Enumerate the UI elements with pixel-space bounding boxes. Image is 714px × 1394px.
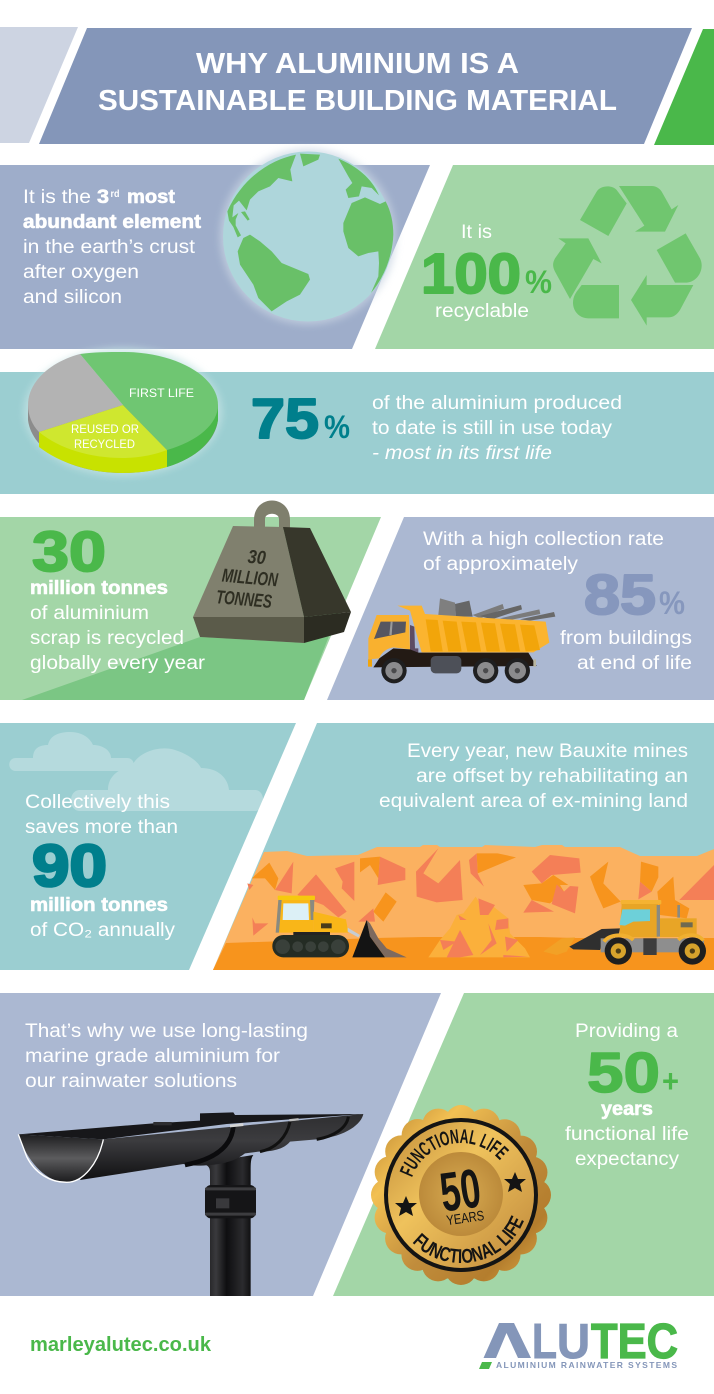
text: aluminium still in use: - most in its first life: [372, 443, 552, 464]
text: rainwater solutions: marine grade aluminium for: [25, 1046, 281, 1067]
text: aluminium still in use: [372, 393, 622, 464]
panel: 75 percent still in use: [0, 348, 714, 494]
icon: bulldozer: [272, 896, 407, 957]
logo: Alutec: L: [532, 1315, 557, 1369]
title banner: WHY ALUMINIUM IS A: [196, 48, 519, 80]
text: fifty plus years: expectancy: [575, 1149, 680, 1170]
text: third most abundant: and silicon: [23, 287, 122, 308]
stat: 75 percent: %: [324, 409, 350, 445]
icon: weight: 30: [247, 547, 267, 569]
panel: CO2 saving: [0, 723, 296, 970]
text: collection rate: of approximately: [423, 554, 579, 575]
chart: pie of aluminium life: RECYCLED: [74, 439, 135, 451]
panel: long-lasting marine grade: [0, 993, 441, 1296]
text: scrap recycled: million tonnes: [30, 578, 168, 599]
text: collection rate: from buildings: [560, 628, 692, 649]
icon: weight: [193, 500, 351, 643]
illustration: gutter and downpipe: [18, 1112, 363, 1296]
text: scrap recycled: of aluminium: [30, 603, 149, 624]
text: scrap recycled: [30, 520, 206, 674]
text: collection rate: %: [659, 585, 685, 621]
chart: pie of aluminium life: [24, 348, 222, 476]
text: bauxite offset: [379, 741, 688, 812]
icon: weight: MILLION: [221, 566, 280, 591]
text: scrap recycled: globally every year: [30, 653, 206, 674]
text: fifty plus years: [565, 1021, 689, 1170]
text: fifty plus years: 50: [587, 1041, 660, 1105]
text: rainwater solutions: our rainwater solutions: [25, 1071, 237, 1092]
text: third most abundant: most: [127, 187, 176, 208]
text: fifty plus years: years: [601, 1099, 653, 1120]
text: third most abundant: It is the: [23, 187, 91, 208]
title banner: [0, 27, 714, 145]
text: third most abundant: rd: [110, 189, 120, 200]
text: bauxite offset: equivalent area of ex-mining land: [379, 791, 688, 812]
icon: recycling arrows: [553, 186, 702, 326]
logo: Alutec: U: [557, 1315, 590, 1369]
text: rainwater solutions: [25, 1021, 308, 1092]
text: rainwater solutions: That’s why we use long-lasting: [25, 1021, 308, 1042]
icon: clouds: [9, 732, 263, 811]
panel: 30 million tonnes: [0, 500, 381, 700]
text: bauxite offset: Every year, new Bauxite mines: [407, 741, 688, 762]
text: collection rate: 85: [584, 563, 656, 627]
stat: 75 percent: 75: [251, 387, 319, 451]
text: collection rate: With a high collection rate: [423, 529, 664, 550]
text: collection rate: [423, 529, 692, 674]
icon: weight: TONNES: [215, 587, 273, 613]
logo: Alutec: ALUMINIUM RAINWATER SYSTEMS: [496, 1360, 677, 1370]
text: third most abundant: [23, 187, 202, 308]
text: aluminium still in use: of the aluminium produced: [372, 393, 622, 414]
logo: Alutec: A: [484, 1316, 532, 1369]
badge: 50 years functional life: FUNCTIONAL LIFE: [412, 1215, 524, 1263]
logo: Alutec: TEC: [591, 1315, 678, 1369]
icon: globe: [220, 148, 396, 324]
badge: 50 years functional life: YEARS: [445, 1207, 485, 1228]
text: scrap recycled: 30: [32, 520, 106, 584]
panel: functional life: [333, 993, 714, 1296]
text: 100 percent recyclable: 100: [421, 242, 521, 306]
text: aluminium still in use: to date is still in use today: [372, 418, 613, 439]
text: 100 percent recyclable: recyclable: [435, 301, 529, 322]
text: saves CO2: million tonnes: [30, 895, 168, 916]
panel: bauxite mines: [213, 723, 714, 970]
text: saves CO2: of CO₂ annually: [30, 920, 176, 941]
panel: abundant element: [0, 148, 430, 349]
text: collection rate: at end of life: [577, 653, 692, 674]
icon: dump truck: [368, 598, 555, 683]
text: 100 percent recyclable: %: [525, 264, 552, 300]
footer url: marleyalutec.co.uk: [30, 1334, 212, 1356]
text: third most abundant: abundant element: [23, 212, 202, 233]
text: saves CO2: [25, 792, 178, 941]
stat: 75 percent: [251, 387, 350, 451]
text: bauxite offset: are offset by rehabilitating an: [416, 766, 688, 787]
text: 100 percent recyclable: [421, 222, 552, 322]
illustration: mining landscape: [213, 845, 714, 970]
panel: collection rate: [327, 517, 714, 700]
text: saves CO2: Collectively this: [25, 792, 170, 813]
chart: pie of aluminium life: REUSED OR: [71, 424, 139, 436]
text: saves CO2: 90: [32, 833, 107, 899]
text: 100 percent recyclable: It is: [461, 222, 492, 243]
text: third most abundant: 3: [97, 187, 109, 208]
text: third most abundant: after oxygen: [23, 262, 139, 283]
text: fifty plus years: +: [662, 1063, 679, 1099]
illustration: rock pile: [428, 897, 530, 957]
text: saves CO2: saves more than: [25, 817, 178, 838]
title banner: SUSTAINABLE BUILDING MATERIAL: [98, 85, 617, 117]
text: third most abundant: in the earth’s crust: [23, 237, 196, 258]
text: scrap recycled: scrap is recycled: [30, 628, 184, 649]
text: fifty plus years: Providing a: [575, 1021, 678, 1042]
badge: 50 years functional life: FUNCTIONAL LIFE: [400, 1129, 510, 1177]
badge: 50 years functional life: [371, 1105, 551, 1285]
logo: Alutec: [479, 1315, 678, 1370]
chart: pie of aluminium life: FIRST LIFE: [129, 388, 194, 400]
panel: recyclable: [375, 165, 714, 349]
badge: 50 years functional life: 50: [436, 1157, 484, 1224]
text: fifty plus years: functional life: [565, 1124, 689, 1145]
icon: wheel loader: [543, 900, 706, 965]
